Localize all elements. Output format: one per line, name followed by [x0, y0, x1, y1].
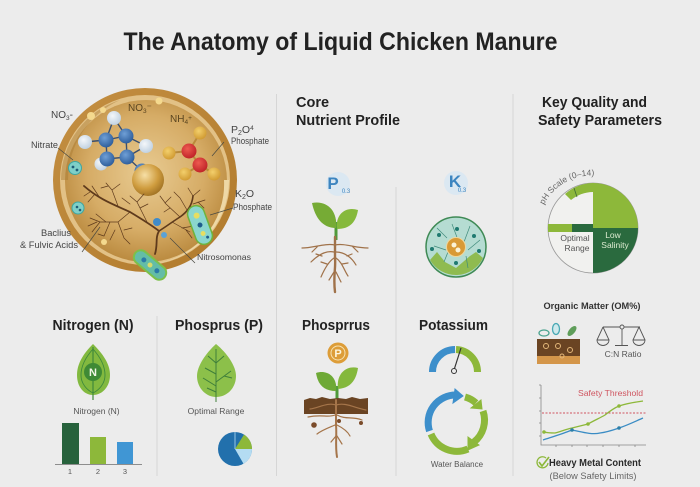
bar chart: [55, 423, 142, 476]
pie chart: [218, 432, 252, 466]
line chart: safety threshold: [539, 385, 646, 447]
molecule and organism labels: 3: [143, 108, 147, 115]
heading: core nutrient profile: Core: [296, 95, 329, 111]
line chart: safety threshold: Safety Threshold: [578, 388, 643, 398]
molecule and organism labels: [20, 103, 272, 262]
molecule and organism labels: NH: [170, 114, 184, 125]
badge: K 0.3: K: [449, 172, 462, 191]
molecule: nitrogen compound: [78, 111, 153, 178]
dial labels: Range: [564, 243, 590, 253]
molecule and organism labels: 4: [250, 125, 254, 132]
molecule and organism labels: 2: [238, 130, 242, 137]
molecule and organism labels: Nitrate: [31, 140, 58, 150]
heading: phosprrus: Phosprrus: [302, 318, 370, 334]
molecule and organism labels: 2: [242, 194, 246, 201]
bacterium: right capsule: [185, 203, 215, 247]
molecule and organism labels: P: [231, 124, 238, 136]
badge: P 0.3: P: [327, 174, 339, 193]
label: optimal range: Optimal Range: [188, 406, 245, 416]
outer droplet sphere: [53, 88, 237, 272]
heading: key quality and safety parameters: Key Quality and: [542, 95, 647, 111]
branching root network: [84, 183, 205, 254]
icon: check mark: [537, 457, 549, 468]
molecule and organism labels: O: [242, 124, 250, 136]
molecule and organism labels: & Fulvic Acids: [20, 240, 79, 250]
dial labels: Salinity: [601, 240, 629, 250]
heading: organic matter: Organic Matter (OM%): [544, 301, 640, 311]
label: C:N ratio: C:N Ratio: [605, 349, 642, 359]
heading: key quality and safety parameters: Safety Parameters: [538, 113, 662, 129]
panel: manure droplet cross-section: [20, 88, 272, 283]
panel: phosphorus: [175, 318, 263, 466]
heading: key quality and safety parameters: [538, 95, 662, 129]
gold sphere: [132, 164, 164, 196]
leader lines: [58, 142, 233, 263]
molecule: phosphate: [162, 126, 220, 180]
label: nitrogen: Nitrogen (N): [73, 406, 120, 416]
icon: soil cell: [426, 217, 486, 277]
icon: nitrogen leaf: [77, 344, 110, 400]
badge: K 0.3: 0.3: [458, 188, 467, 194]
pH scale curved label: pH Scale (0–14): [540, 170, 594, 206]
molecule and organism labels: Phosphate: [233, 202, 272, 212]
icon: nitrogen leaf: N: [89, 367, 97, 379]
label: water balance: Water Balance: [431, 460, 484, 469]
molecule and organism labels: 4: [184, 119, 188, 126]
icon: balance scale: [597, 325, 645, 346]
molecule and organism labels: ⁻: [147, 103, 152, 114]
icon: soil with microbes: [537, 324, 580, 364]
badge: P 0.3: [326, 172, 351, 196]
panel: phosphorus plant: [302, 318, 370, 457]
molecule and organism labels: Baclius: [41, 228, 72, 238]
badge: K 0.3: [444, 171, 468, 195]
gauge: [432, 348, 478, 374]
heading: potassium: Potassium: [419, 318, 488, 334]
bar chart: 2: [96, 467, 100, 476]
heavy metal content text: (Below Safety Limits): [550, 471, 636, 481]
molecule and organism labels: K: [235, 188, 242, 200]
microbes: teal cells: [68, 162, 167, 238]
heading: core nutrient profile: [296, 95, 400, 129]
heading: nitrogen: Nitrogen (N): [52, 318, 134, 334]
bar chart: 1: [68, 467, 72, 476]
molecule and organism labels: O: [246, 188, 254, 200]
molecule and organism labels: +: [188, 115, 192, 122]
dial labels: Optimal: [560, 233, 590, 243]
heading: phosprus: Phosprus (P): [175, 318, 263, 334]
molecule and organism labels: Phosphate: [231, 136, 269, 146]
badge: P 0.3: 0.3: [342, 189, 351, 195]
panel: nitrogen: [52, 318, 142, 476]
icon: P coin: P: [334, 348, 342, 360]
heavy metal content text: [549, 458, 642, 481]
bacterium: bottom capsule: [131, 247, 169, 283]
heavy metal content text: Heavy Metal Content: [549, 458, 642, 469]
heading: core nutrient profile: Nutrient Profile: [296, 113, 400, 129]
bar chart: 3: [123, 467, 127, 476]
dial labels: [560, 230, 629, 253]
molecule and organism labels: NO: [51, 110, 66, 121]
panel: potassium: [419, 318, 488, 469]
icon: veined leaf: [197, 344, 236, 402]
icon: plant in soil: [304, 367, 368, 457]
icon: water balance cycle: [428, 389, 485, 451]
molecule and organism labels: -: [70, 110, 73, 121]
pH and salinity dial: [540, 170, 638, 274]
title: The Anatomy of Liquid Chicken Manure: [124, 28, 558, 56]
molecule and organism labels: 3: [66, 115, 70, 122]
molecule and organism labels: NO: [128, 103, 143, 114]
icon: seedling with roots: [302, 202, 368, 292]
dial labels: Low: [605, 230, 622, 240]
molecule and organism labels: Nitrosomonas: [197, 252, 251, 262]
